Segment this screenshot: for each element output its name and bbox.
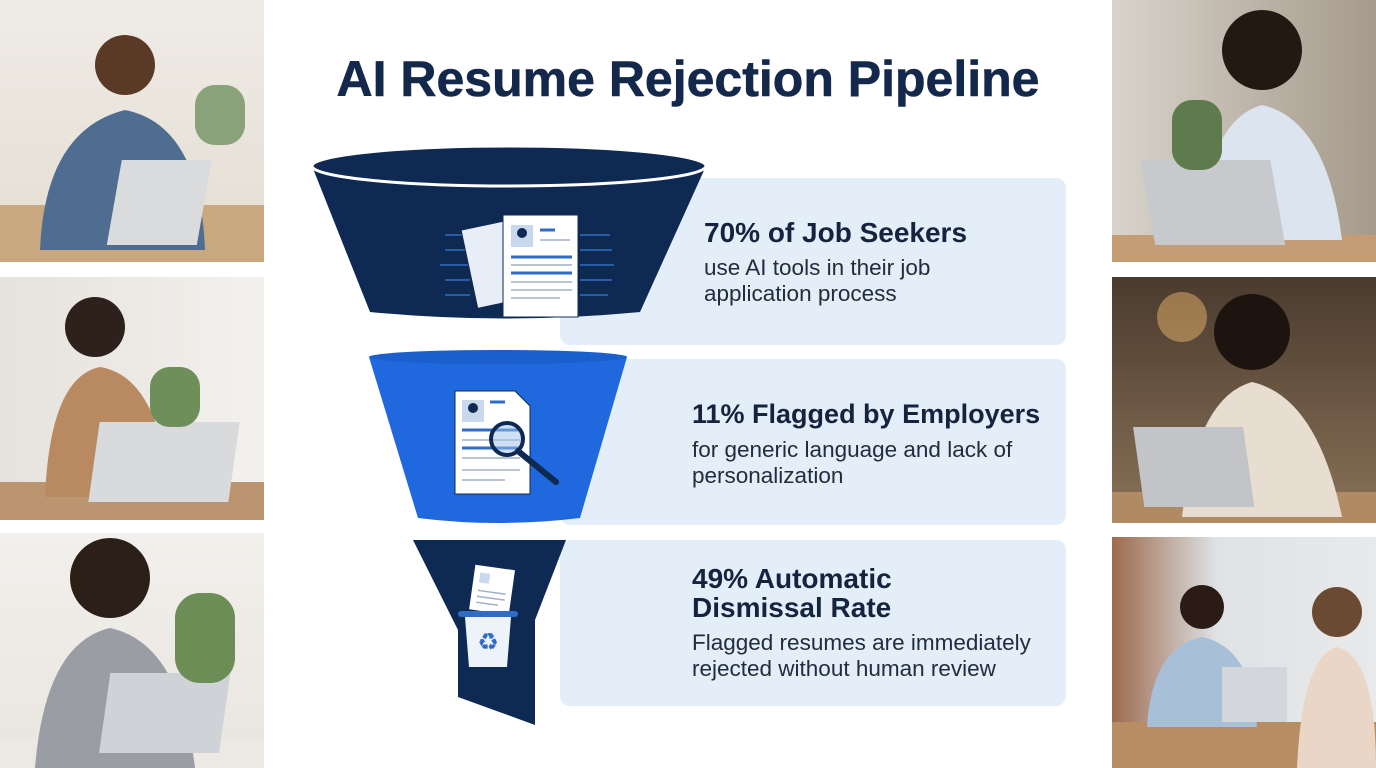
panel: 11% flagged	[560, 359, 1066, 525]
photo: man at laptop top-left	[0, 0, 264, 262]
text: 70% of Job Seekers	[704, 217, 967, 306]
panel: 49% dismissal	[560, 540, 1066, 706]
text: 11% Flagged by Employers: personalization	[692, 463, 843, 488]
text: 11% Flagged by Employers	[692, 399, 1040, 488]
photo: woman at laptop middle-left	[0, 277, 264, 520]
funnel stage 1	[312, 146, 706, 318]
text: 49% Automatic Dismissal Rate: 49% Automatic	[692, 563, 892, 594]
photo: woman at laptop top-right	[1112, 0, 1376, 262]
funnel stage 3	[413, 540, 566, 725]
text: 11% Flagged by Employers: 11% Flagged by Employers	[692, 399, 1040, 429]
text: 70% of Job Seekers: use AI tools in their job	[704, 255, 930, 280]
photo: two people in cafe bottom-right	[1112, 537, 1376, 768]
panel: 70% job seekers	[560, 178, 1066, 345]
text: 49% Automatic Dismissal Rate: rejected without human review	[692, 656, 996, 681]
text: 49% Automatic Dismissal Rate: Dismissal Rate	[692, 592, 891, 623]
funnel stage 3: ♻	[477, 628, 499, 656]
text: 70% of Job Seekers: 70% of Job Seekers	[704, 217, 967, 248]
photo: woman in cafe middle-right	[1112, 277, 1376, 523]
text: 11% Flagged by Employers: for generic language and lack of	[692, 437, 1012, 462]
text: 49% Automatic Dismissal Rate: Flagged resumes are immediately	[692, 630, 1031, 655]
funnel stage 2	[369, 350, 627, 523]
photo: woman with glasses bottom-left	[0, 533, 264, 768]
text: 70% of Job Seekers: application process	[704, 281, 897, 306]
title: AI Resume Rejection Pipeline	[336, 51, 1039, 107]
text: 49% Automatic Dismissal Rate	[692, 563, 1031, 681]
